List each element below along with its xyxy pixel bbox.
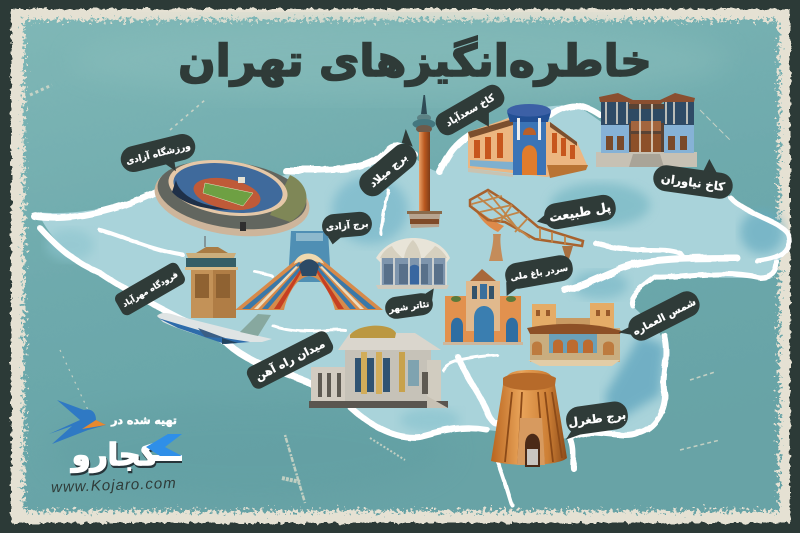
airplane [157,313,272,344]
label: Baghe Melli gate [501,253,576,296]
paper scratches [30,85,730,503]
label: Shams-ol-Emareh: شمس العماره [631,297,698,338]
Tughrul tower [491,370,567,467]
Rail station [309,326,448,408]
logo wordmark: کجارو [71,440,160,475]
Saadabad palace [468,104,588,178]
Baghe Melli gate [443,269,523,345]
label: Tabiat bridge: پل طبیعت [548,199,612,225]
map outline [34,106,789,505]
Mehrabad airport tower [185,236,238,318]
label: Tabiat bridge [534,193,618,232]
label: Azadi tower: برج آزادی [325,218,369,233]
label: Saadabad palace: کاخ سعدآباد [443,90,497,129]
label: Tughrul tower: برج طغرل [567,408,627,430]
label: Azadi stadium: ورزشگاه آزادی [125,140,192,167]
label: City Theater [383,288,437,320]
label: Milad tower [350,129,427,201]
tagline: تهیه شده در [110,414,177,427]
label: Shams-ol-Emareh [615,287,704,349]
City Theater [376,238,450,289]
logo wordmark [70,434,182,475]
label: Mehrabad airport [113,261,187,317]
Pol-e Tabiat bridge [470,190,583,261]
website url: www.Kojaro.com [51,475,177,496]
Azadi tower [235,231,383,310]
Kojaro logo [49,400,182,496]
label: Niavaran palace: کاخ نیاوران [660,171,726,195]
label: Rail square: میدان راه آهن [253,336,327,384]
label: Saadabad palace [432,81,514,149]
stadium: Azadi [150,152,314,246]
icon: blue bird [49,400,106,444]
Milad tower [407,95,442,228]
label: Azadi tower [321,211,373,245]
label: Tughrul tower [561,400,630,440]
label: Rail square [244,329,336,391]
label: Azadi stadium [118,131,200,184]
Niavaran palace [596,93,697,167]
map of Tehran province [34,105,789,505]
label: Milad tower: برج میلاد [367,151,410,190]
label: Mehrabad airport: فرودگاه مهرآباد [120,269,180,309]
Shams-ol-Emareh [527,303,622,366]
label: City Theater: تئاتر شهر [387,300,430,315]
logo wordmark: کجارو [70,438,159,473]
label: Niavaran palace [652,152,736,200]
title: خاطره‌انگیزهای تهران [178,35,652,87]
label: Baghe Melli gate: سردر باغ ملی [510,263,569,283]
